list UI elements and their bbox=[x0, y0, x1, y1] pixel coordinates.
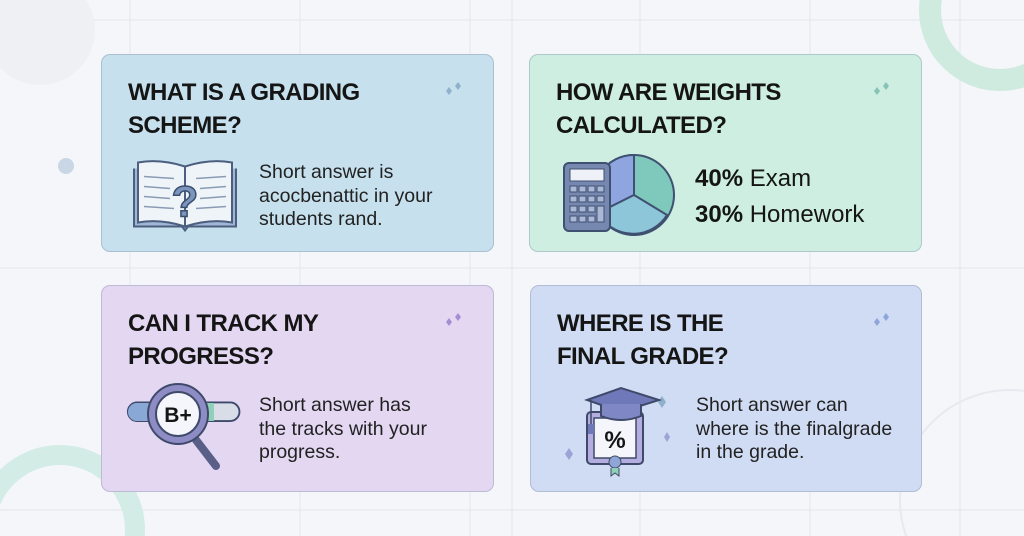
heading bbox=[556, 79, 781, 139]
answer text: Short answer has bbox=[259, 394, 411, 416]
icon: sparkle bbox=[446, 82, 461, 95]
icon: open book with question mark bbox=[133, 160, 237, 232]
answer text: Short answer is bbox=[259, 161, 393, 183]
answer text: progress. bbox=[259, 441, 340, 463]
heading: SCHEME? bbox=[128, 112, 241, 139]
icon: open book with question mark: ? bbox=[172, 178, 198, 226]
panel: final grade bbox=[530, 285, 922, 492]
heading: HOW ARE WEIGHTS bbox=[556, 79, 781, 106]
heading: WHERE IS THE bbox=[557, 310, 723, 337]
panel: weights bbox=[529, 54, 922, 252]
icon: calculator and pie chart bbox=[563, 154, 675, 236]
icon: magnifier with B+: B+ bbox=[164, 404, 192, 427]
weights text: 40% Exam bbox=[695, 165, 811, 192]
heading: FINAL GRADE? bbox=[557, 343, 728, 370]
panel: grading scheme bbox=[101, 54, 494, 252]
icon: graduation cap and certificate bbox=[565, 387, 670, 477]
icon: sparkle bbox=[874, 82, 889, 95]
heading: PROGRESS? bbox=[128, 343, 273, 370]
heading bbox=[128, 310, 318, 370]
weights text bbox=[695, 165, 864, 228]
answer text: acocbenattic in your bbox=[259, 184, 432, 206]
answer text: in the grade. bbox=[696, 441, 804, 463]
icon: sparkle bbox=[446, 313, 461, 326]
answer text: where is the finalgrade bbox=[696, 418, 892, 440]
heading bbox=[128, 79, 360, 139]
heading: CAN I TRACK MY bbox=[128, 310, 318, 337]
icon: magnifier with B+ bbox=[126, 383, 240, 470]
answer text bbox=[259, 394, 427, 463]
heading: WHAT IS A GRADING bbox=[128, 79, 360, 106]
answer text: students rand. bbox=[259, 208, 383, 230]
heading bbox=[557, 310, 728, 370]
heading: CALCULATED? bbox=[556, 112, 726, 139]
answer text: Short answer can bbox=[696, 394, 848, 416]
weights text: 30% Homework bbox=[695, 201, 864, 228]
answer text bbox=[696, 394, 892, 463]
panel: track progress bbox=[101, 285, 494, 492]
icon: sparkle bbox=[874, 313, 889, 326]
answer text bbox=[259, 161, 432, 230]
answer text: the tracks with your bbox=[259, 418, 427, 440]
icon: graduation cap and certificate: % bbox=[604, 427, 626, 454]
